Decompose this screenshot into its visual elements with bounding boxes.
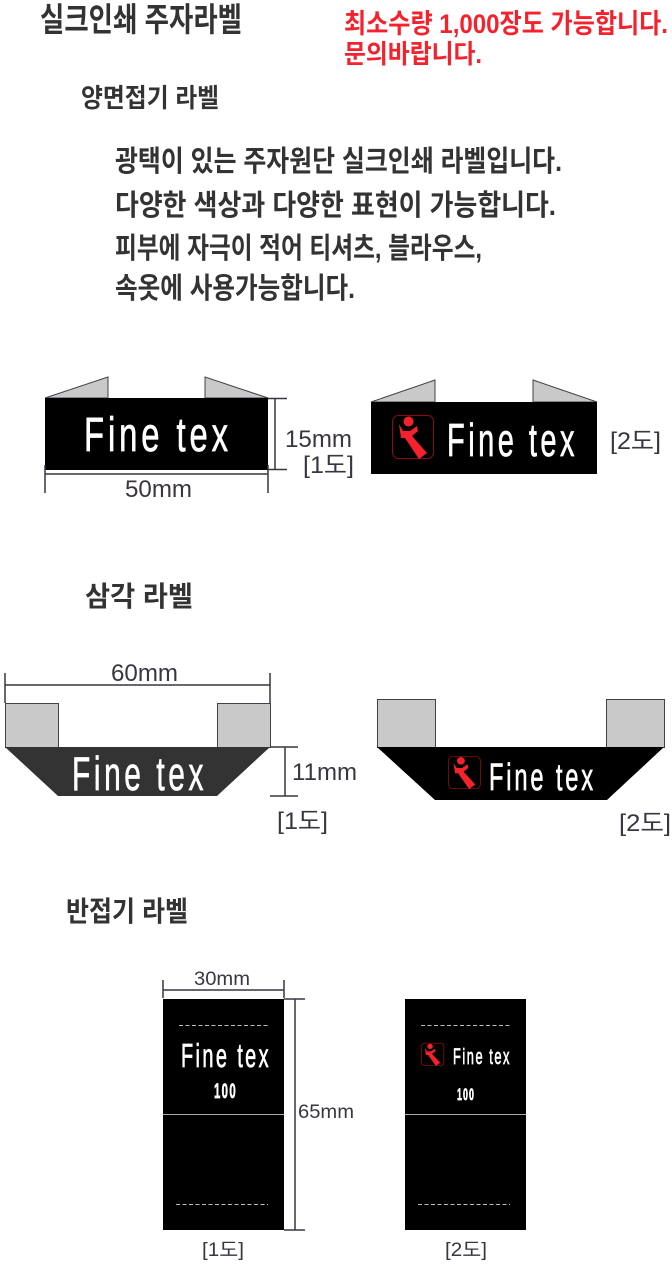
triangle label, 2 colours [377, 700, 664, 800]
half fold label, 2 colours: Fine tex [453, 1044, 511, 1069]
caption: 2 colours: [2도] [619, 810, 671, 837]
caption: 2 colours: [2도] [445, 1240, 487, 1261]
title: 실크인쇄 주자라벨 [40, 1, 242, 38]
half fold label, 2 colours: 100 [457, 1085, 475, 1104]
half fold label, 2 colours [405, 999, 526, 1230]
callout: minimum order [344, 9, 668, 69]
icon: red logo [392, 416, 434, 459]
dimension: 50mm [45, 465, 268, 503]
half fold label, 1 colour: Fine tex [181, 1037, 271, 1074]
caption: 1 colour: [1도] [303, 452, 354, 479]
heading: double fold label: 양면접기 라벨 [81, 83, 219, 113]
dimension: 60mm [5, 660, 270, 703]
dimension: 30mm [163, 969, 284, 998]
dimension: 11mm: 11mm [292, 759, 357, 786]
triangle label, 2 colours: Fine tex [489, 757, 596, 799]
heading: half fold label: 반접기 라벨 [66, 896, 188, 927]
half fold label, 1 colour: 100 [214, 1080, 237, 1103]
dimension: 65mm [284, 999, 354, 1230]
text block: description [115, 145, 562, 305]
text block: description: 광택이 있는 주자원단 실크인쇄 라벨입니다. [115, 145, 562, 178]
text block: description: 다양한 색상과 다양한 표현이 가능합니다. [115, 189, 556, 222]
double fold label, 1 colour: Fine tex [84, 409, 232, 462]
dimension: 65mm: 65mm [298, 1102, 354, 1123]
double fold label, 1 colour [45, 377, 268, 470]
dimension: 60mm: 60mm [111, 660, 178, 687]
caption: 2 colours: [2도] [610, 428, 661, 455]
dimension: 15mm: 15mm [285, 426, 352, 453]
double fold label, 2 colours [371, 380, 597, 474]
heading: triangle label: 삼각 라벨 [85, 581, 193, 612]
caption: 1 colour: [1도] [277, 808, 328, 835]
icon: red logo [448, 756, 480, 789]
half fold label, 1 colour [163, 999, 284, 1230]
triangle label, 1 colour: Fine tex [72, 747, 207, 800]
icon: red logo [421, 1043, 444, 1066]
double fold label, 2 colours: Fine tex [447, 414, 578, 466]
text block: description: 피부에 자극이 적어 티셔츠, 블라우스, [115, 232, 482, 265]
dimension: 15mm [268, 398, 352, 470]
dimension: 30mm: 30mm [194, 969, 250, 990]
triangle label, 1 colour [5, 704, 270, 800]
callout: minimum order: 문의바랍니다. [344, 39, 482, 69]
dimension: 50mm: 50mm [125, 476, 192, 503]
dimension: 11mm [270, 747, 357, 796]
caption: 1 colour: [1도] [202, 1240, 244, 1261]
text block: description: 속옷에 사용가능합니다. [115, 272, 355, 305]
